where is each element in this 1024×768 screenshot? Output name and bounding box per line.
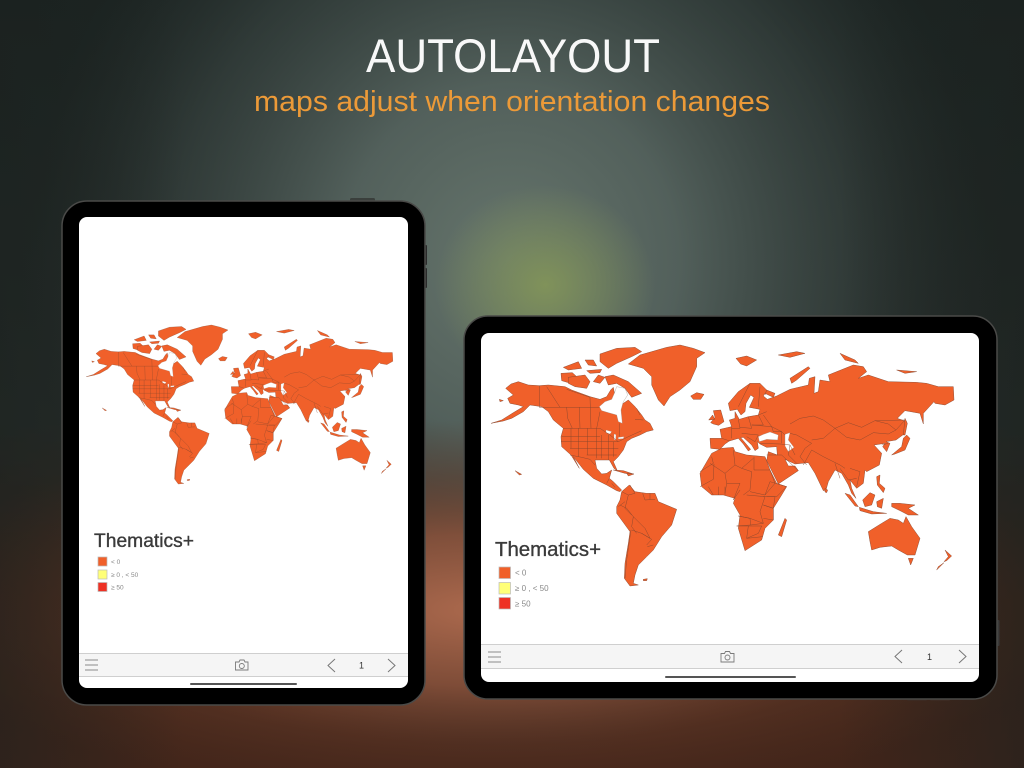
subtitle: maps adjust when orientation changes	[254, 86, 770, 118]
legend swatch: below 0: < 0	[111, 559, 121, 566]
icon: menu	[85, 660, 98, 670]
legend swatch: 50 and above: ≥ 50	[111, 584, 124, 592]
legend title: Thematics+	[94, 530, 194, 552]
icon: previous	[328, 659, 335, 672]
legend swatch: below 0: < 0	[515, 568, 527, 578]
home indicator: portrait	[190, 683, 297, 685]
icon: menu	[488, 652, 501, 662]
icon: previous	[895, 650, 902, 663]
world map: landscape	[491, 345, 954, 586]
page number: 1	[927, 652, 932, 662]
page number: 1	[359, 660, 364, 670]
legend swatch: 50 and above: ≥ 50	[515, 600, 531, 608]
legend swatch: 0 to 50: ≥ 0 , < 50	[111, 572, 139, 579]
toolbar: portrait	[79, 653, 408, 676]
legend title: Thematics+	[495, 538, 601, 561]
tablet hardware: portrait	[62, 198, 427, 705]
legend: portrait	[94, 530, 194, 592]
legend: landscape	[495, 538, 601, 609]
legend swatch: 0 to 50: ≥ 0 , < 50	[515, 584, 549, 593]
icon: next	[959, 650, 966, 663]
portrait tablet	[62, 198, 427, 705]
icon: camera	[236, 660, 248, 670]
tablet hardware: landscape	[464, 316, 1000, 701]
title: AUTOLAYOUT	[366, 29, 660, 82]
icon: next	[388, 659, 395, 672]
icon: camera	[721, 652, 734, 662]
home indicator: landscape	[665, 676, 796, 678]
toolbar: landscape	[481, 644, 979, 668]
world map: portrait	[86, 325, 393, 484]
landscape tablet	[464, 316, 1000, 701]
